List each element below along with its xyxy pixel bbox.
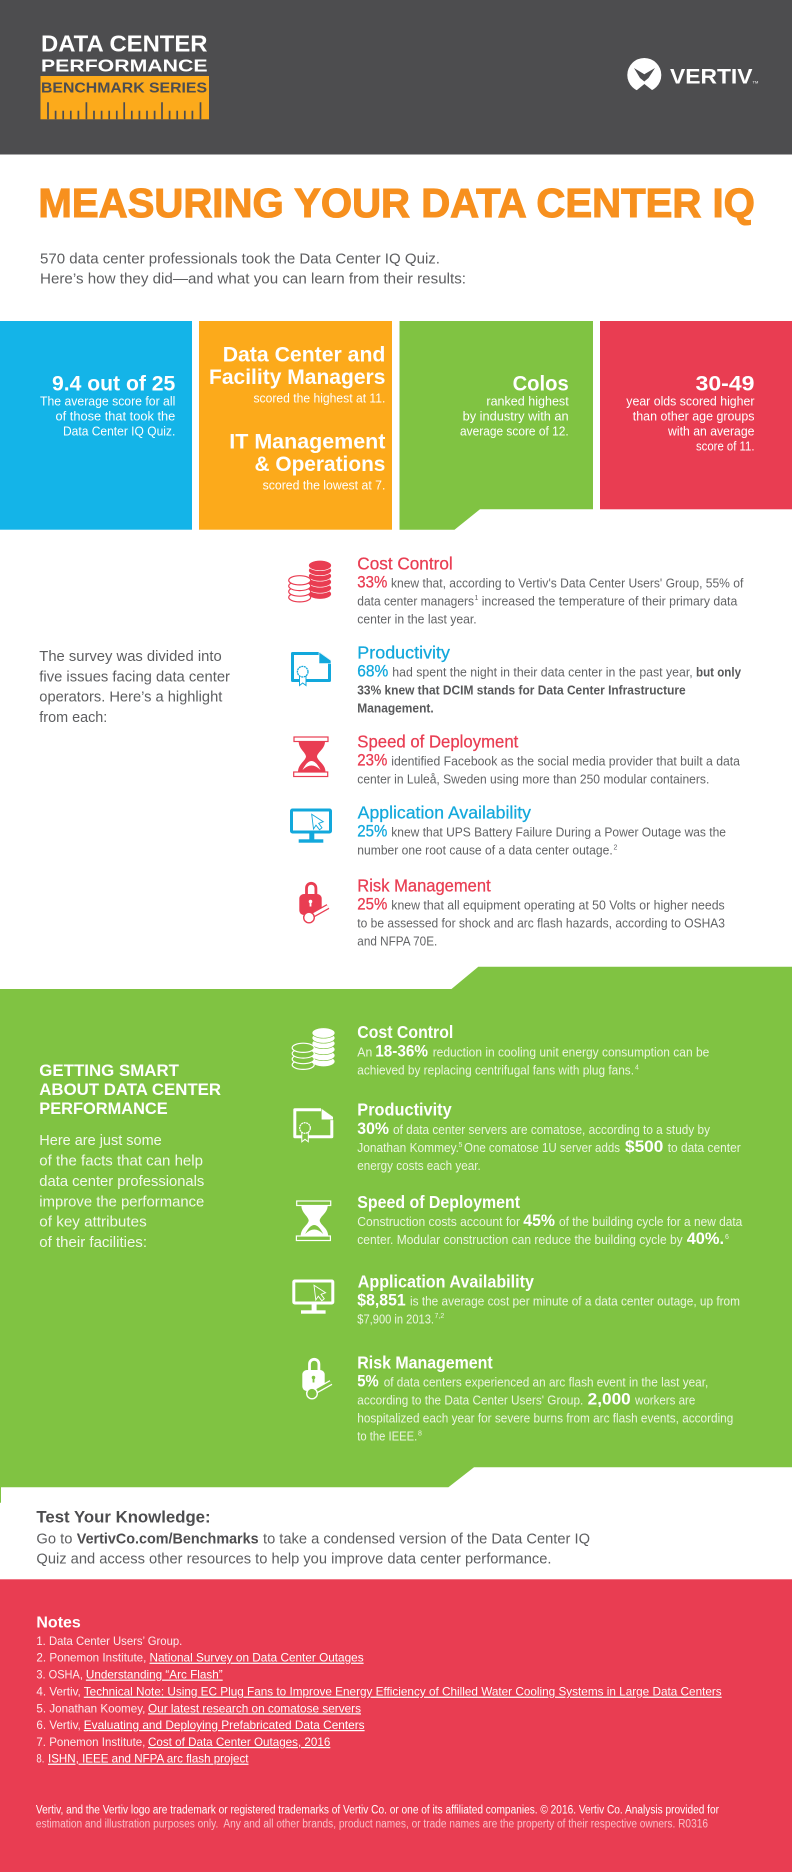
block: Risk Management: to be assessed for shock and arc flash hazards, according to OSHA3 <box>357 915 725 930</box>
survey description text: five issues facing data center <box>39 668 230 685</box>
block: Productivity (green): $500 <box>625 1137 663 1156</box>
block: Risk Management: Risk Management <box>357 875 491 895</box>
block: Risk Management (green) <box>357 1353 733 1444</box>
panel: job roles (orange): Data Center and <box>223 342 385 366</box>
survey description text: The survey was divided into <box>39 648 222 665</box>
block: Cost Control (green): achieved by replacing centrifugal fans with plug fans. <box>357 1063 634 1078</box>
call to action: Test Your Knowledge: VertivCo.com/Benchmarks <box>77 1530 259 1547</box>
block: Cost Control (green): Cost Control <box>357 1022 453 1042</box>
block: Speed of Deployment (green): 40%. <box>687 1229 724 1248</box>
block: Application Availability (green): is the average cost per minute of a data center outage, up from <box>410 1293 740 1308</box>
notes list: 1. Data Center Users’ Group. <box>36 1634 182 1648</box>
panel: colos (green): Colos <box>513 372 569 396</box>
green section intro text: of the facts that can help <box>39 1153 203 1170</box>
block: Productivity (green): of data center servers are comatose, according to a study by <box>393 1122 710 1137</box>
block: Application Availability (green): 7,2 <box>434 1313 444 1320</box>
panel: average score (blue): The average score for all <box>40 394 175 409</box>
block: Cost Control: Cost Control <box>357 553 453 573</box>
block: Risk Management (green): 8 <box>418 1430 422 1438</box>
panel: age group (red): with an average <box>667 424 754 439</box>
notes list: 2. Ponemon Institute, <box>36 1651 146 1665</box>
block: Productivity (green): 5 <box>458 1142 462 1149</box>
series logo: Data Center Performance Benchmark Series <box>40 31 209 119</box>
block: Application Availability (green): $8,851 <box>357 1290 406 1309</box>
block: Risk Management (green): of data centers experienced an arc flash event in the last year, <box>384 1375 708 1390</box>
block: Speed of Deployment (green): Speed of Deployment <box>357 1192 520 1212</box>
icon: lock and key (white) <box>302 1359 331 1399</box>
block: Application Availability: number one root cause of a data center outage. <box>357 843 613 858</box>
block: Speed of Deployment: identified Facebook as the social media provider that built a data <box>391 753 741 768</box>
block: Risk Management (green): to the IEEE. <box>357 1429 417 1444</box>
icon: coins (white) <box>292 1028 335 1069</box>
panel: colos (green) <box>400 321 593 530</box>
block: Cost Control (green): 4 <box>635 1064 639 1072</box>
icon: hourglass (white) <box>296 1201 331 1240</box>
title: MEASURING YOUR DATA CENTER IQ <box>38 180 755 226</box>
panel: colos (green): by industry with an <box>463 409 569 424</box>
block: Cost Control: 1 <box>474 595 478 602</box>
notes list: Our latest research on comatose servers <box>148 1701 361 1715</box>
heading: Getting Smart About Data Center Performance <box>39 1061 221 1118</box>
block: Application Availability (green) <box>357 1271 740 1326</box>
panel: colos (green): ranked highest <box>486 394 569 409</box>
panel: job roles (orange): scored the lowest at 7. <box>263 477 385 492</box>
panel: average score (blue): of those that took the <box>56 409 175 424</box>
block: Cost Control: knew that, according to Vertiv's Data Center Users' Group, 55% of <box>391 575 744 590</box>
block: Cost Control (green): An <box>357 1045 372 1060</box>
notes list: Evaluating and Deploying Prefabricated Data Centers <box>84 1718 365 1732</box>
block: Productivity: Productivity <box>357 643 450 663</box>
block: Speed of Deployment <box>357 731 741 786</box>
block: Speed of Deployment (green): 6 <box>725 1234 729 1241</box>
block: Productivity (green): One comatose 1U server adds <box>464 1140 620 1155</box>
icon: hourglass (red) <box>294 737 328 776</box>
block: Risk Management (green): workers are <box>634 1393 695 1408</box>
block: Risk Management (green): according to the Data Center Users' Group. <box>357 1393 583 1408</box>
green section intro text: Here are just some <box>39 1132 162 1149</box>
block: Productivity (green): 30% <box>357 1119 389 1138</box>
survey description text: from each: <box>39 709 107 726</box>
block: Speed of Deployment (green): of the building cycle for a new data <box>559 1214 743 1229</box>
green section intro text <box>39 1132 204 1251</box>
block: Cost Control (green): 18-36% <box>375 1042 428 1061</box>
block: Cost Control: data center managers <box>357 593 474 608</box>
survey description text: operators. Here’s a highlight <box>39 689 223 706</box>
block: Application Availability: 2 <box>614 844 618 852</box>
block: Application Availability (green): Application Availability <box>358 1271 534 1291</box>
call to action: Test Your Knowledge <box>36 1508 590 1568</box>
block: Cost Control <box>357 553 744 626</box>
panel: age group (red): than other age groups <box>633 409 755 424</box>
panel: age group (red): score of 11. <box>696 439 754 454</box>
block: Risk Management (green): Risk Management <box>357 1353 493 1373</box>
legal text <box>36 1804 719 1831</box>
panel: job roles (orange): & Operations <box>254 452 385 476</box>
legal text: Vertiv, and the Vertiv logo are trademark or registered trademarks of Vertiv Co. or one of its affiliated companies. © 2016. Vertiv Co. Analysis provided for <box>36 1804 719 1816</box>
block: Productivity: had spent the night in their data center in the past year, <box>392 665 693 680</box>
block: Risk Management <box>357 875 725 948</box>
notes heading: Notes <box>36 1615 81 1632</box>
notes list: 6. Vertiv, <box>36 1718 81 1732</box>
notes list: 4. Vertiv, <box>36 1685 81 1699</box>
call to action: Test Your Knowledge: to take a condensed version of the Data Center IQ <box>263 1530 590 1547</box>
intro text <box>40 250 466 288</box>
panel: age group (red): year olds scored higher <box>626 394 755 409</box>
icon: certificate (blue) <box>292 652 331 686</box>
header band <box>0 0 792 154</box>
notes list: Technical Note: Using EC Plug Fans to Improve Energy Efficiency of Chilled Water Cooling Systems in Large Data Centers <box>84 1685 722 1699</box>
block: Risk Management: 25% <box>357 894 387 913</box>
heading: Getting Smart About Data Center Performance: GETTING SMART <box>39 1061 180 1080</box>
block: Cost Control: 33% <box>357 572 387 591</box>
block: Risk Management: and NFPA 70E. <box>357 933 437 948</box>
panel: green section background <box>0 967 792 1503</box>
intro text: 570 data center professionals took the Data Center IQ Quiz. <box>40 250 440 267</box>
notes list: Understanding “Arc Flash” <box>86 1668 223 1682</box>
panel: job roles (orange) <box>199 321 392 530</box>
intro text: Here’s how they did—and what you can learn from their results: <box>40 271 466 288</box>
block: Speed of Deployment (green): center. Modular construction can reduce the building cycle by <box>357 1232 683 1247</box>
notes list: Cost of Data Center Outages, 2016 <box>148 1735 331 1749</box>
panel: job roles (orange): scored the highest at 11. <box>254 391 385 406</box>
call to action: Test Your Knowledge: Test Your Knowledge: <box>36 1508 211 1527</box>
block: Productivity (green): to data center <box>668 1140 741 1155</box>
notes list: 7. Ponemon Institute, <box>36 1735 145 1749</box>
block: Risk Management (green): 2,000 <box>588 1390 631 1409</box>
block: Speed of Deployment: Speed of Deployment <box>357 731 518 751</box>
panel: age group (red): 30-49 <box>696 372 755 396</box>
block: Risk Management: knew that all equipment operating at 50 Volts or higher needs <box>391 897 725 912</box>
heading: Getting Smart About Data Center Performance: ABOUT DATA CENTER <box>39 1080 221 1099</box>
panel: average score (blue): 9.4 out of 25 <box>52 372 175 396</box>
notes list: National Survey on Data Center Outages <box>150 1651 364 1665</box>
icon: certificate (white) <box>295 1108 333 1142</box>
notes list: 8. <box>36 1752 44 1766</box>
block: Application Availability: Application Availability <box>358 803 531 823</box>
block: Application Availability (green): $7,900 in 2013. <box>357 1311 434 1326</box>
series logo: Data Center Performance Benchmark Series: DATA CENTER <box>41 31 208 57</box>
block: Risk Management (green): 5% <box>357 1372 379 1391</box>
green section intro text: data center professionals <box>39 1173 204 1190</box>
heading: Getting Smart About Data Center Performance: PERFORMANCE <box>39 1099 168 1118</box>
green section intro text: improve the performance <box>39 1193 204 1210</box>
Vertiv logo: TM <box>752 79 758 84</box>
block: Cost Control: center in the last year. <box>357 611 477 626</box>
block: Productivity (green): Jonathan Kommey. <box>357 1140 459 1155</box>
Vertiv logo: VERTIV <box>670 65 752 88</box>
survey description text <box>39 648 230 726</box>
panel: colos (green): average score of 12. <box>460 424 569 439</box>
icon: monitor (white) <box>294 1281 333 1314</box>
block: Speed of Deployment (green) <box>357 1192 743 1248</box>
block: Cost Control (green): reduction in cooling unit energy consumption can be <box>433 1045 709 1060</box>
panel: average score (blue): Data Center IQ Quiz. <box>63 424 175 439</box>
series logo: Data Center Performance Benchmark Series: BENCHMARK SERIES <box>41 80 207 97</box>
block: Productivity: 68% <box>357 662 388 681</box>
panel: job roles (orange): Facility Managers <box>209 365 385 389</box>
block: Speed of Deployment (green): 45% <box>523 1211 555 1230</box>
block: Application Availability: 25% <box>357 822 387 841</box>
notes list: ISHN, IEEE and NFPA arc flash project <box>48 1752 249 1766</box>
block: Speed of Deployment (green): Construction costs account for <box>357 1214 521 1229</box>
block: Productivity (green): Productivity <box>357 1100 452 1120</box>
notes list: 5. Jonathan Koomey, <box>36 1701 145 1715</box>
block: Cost Control (green) <box>357 1022 709 1078</box>
icon: coins (red) <box>289 560 332 602</box>
call to action: Test Your Knowledge: Go to <box>36 1530 72 1547</box>
block: Productivity: 33% knew that DCIM stands for Data Center Infrastructure <box>357 682 686 697</box>
panel: job roles (orange): IT Management <box>229 429 385 453</box>
green section intro text: of key attributes <box>39 1214 147 1231</box>
panel: notes footer <box>0 1579 792 1872</box>
Vertiv logo <box>627 58 758 92</box>
notes list <box>36 1634 722 1766</box>
block: Productivity (green): energy costs each year. <box>357 1158 481 1173</box>
series logo: Data Center Performance Benchmark Series: PERFORMANCE <box>41 56 208 76</box>
icon: monitor (blue) <box>292 810 330 843</box>
legal text: estimation and illustration purposes only. Any and all other brands, product names, or trade names are the property of their respective owners. R0316 <box>36 1819 708 1831</box>
block: Application Availability: knew that UPS Battery Failure During a Power Outage was the <box>391 825 726 840</box>
block: Productivity: Management. <box>357 700 434 715</box>
block: Risk Management (green): hospitalized each year for severe burns from arc flash events, according <box>357 1411 733 1426</box>
green section intro text: of their facilities: <box>39 1234 147 1251</box>
block: Speed of Deployment: center in Luleå, Sweden using more than 250 modular containers. <box>357 771 709 786</box>
icon: lock and key (red) <box>299 883 328 923</box>
block: Productivity <box>357 643 742 715</box>
call to action: Test Your Knowledge: Quiz and access other resources to help you improve data center performance. <box>36 1551 551 1568</box>
block: Productivity (green) <box>357 1100 741 1173</box>
notes list: 3. OSHA, <box>36 1668 83 1682</box>
panel: age group (red) <box>600 321 792 509</box>
block: Cost Control: increased the temperature of their primary data <box>482 593 738 608</box>
block: Productivity: but only <box>696 665 742 680</box>
block: Application Availability <box>357 803 726 858</box>
panel: average score (blue) <box>0 321 192 530</box>
block: Speed of Deployment: 23% <box>357 750 387 769</box>
